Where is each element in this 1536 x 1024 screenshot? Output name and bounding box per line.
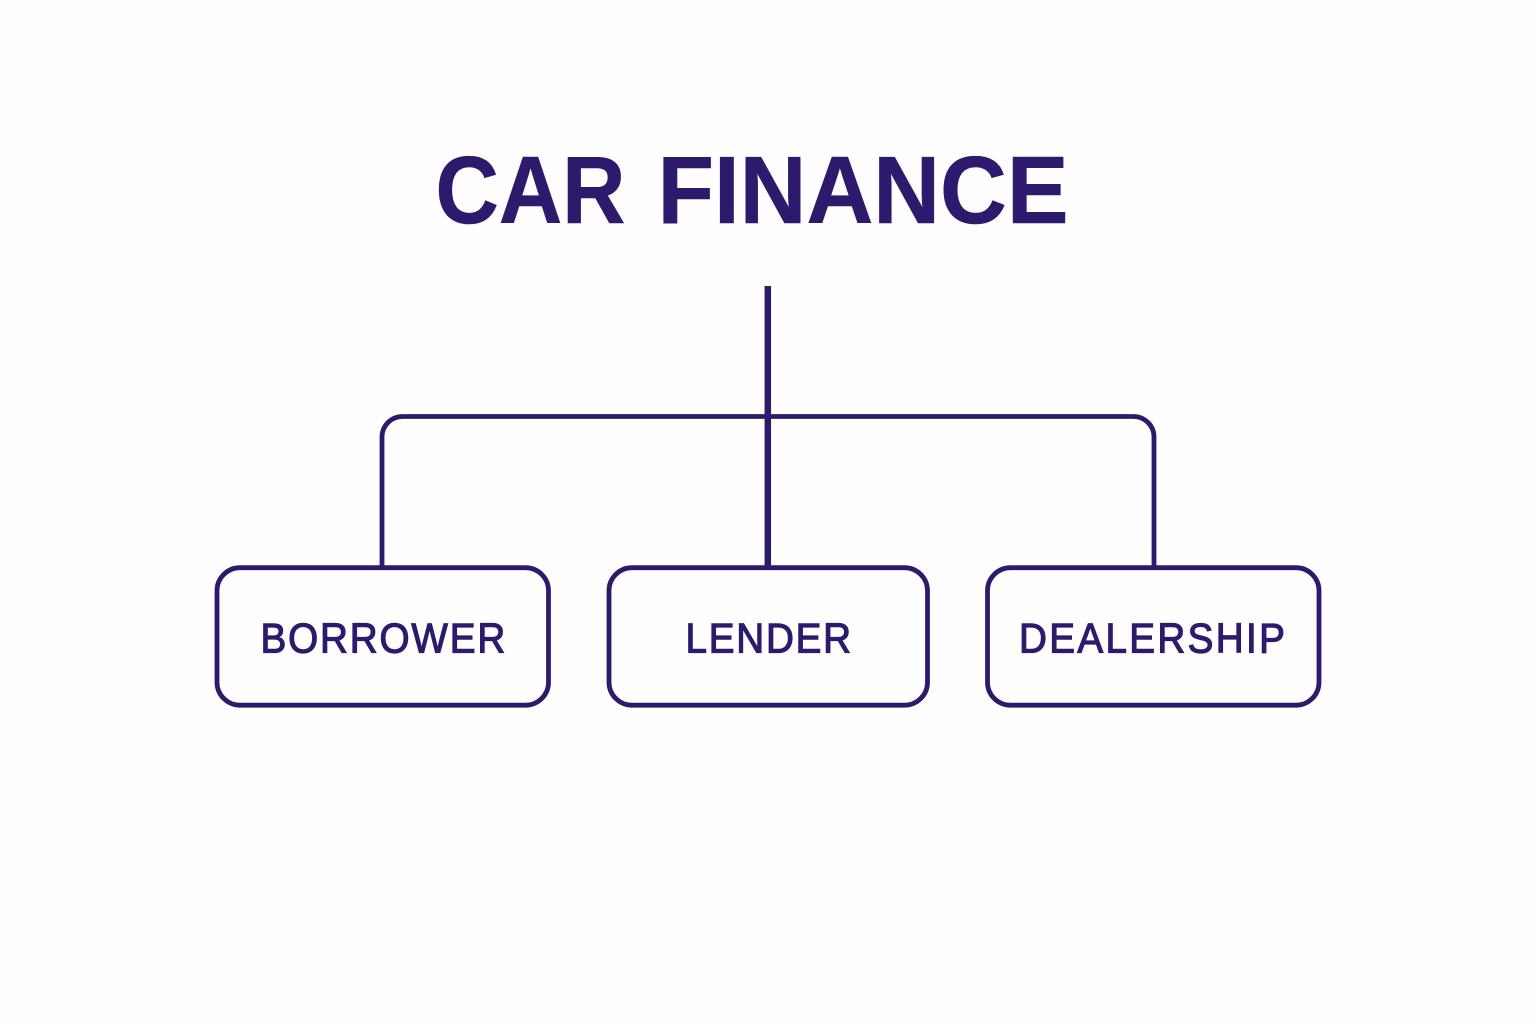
box: borrower bbox=[217, 568, 548, 705]
box: lender bbox=[609, 568, 928, 705]
box: dealership: DEALERSHIP bbox=[1019, 614, 1285, 662]
box: borrower: BORROWER bbox=[260, 614, 505, 662]
title: CAR bbox=[436, 137, 626, 244]
connector: horizontal bracket to borrower and dealership bbox=[382, 416, 1154, 568]
box: lender: LENDER bbox=[686, 614, 851, 662]
box: dealership bbox=[988, 568, 1319, 705]
title bbox=[436, 137, 1068, 244]
connector: vertical trunk from title to lender bbox=[765, 286, 771, 568]
title: FINANCE bbox=[658, 137, 1068, 244]
